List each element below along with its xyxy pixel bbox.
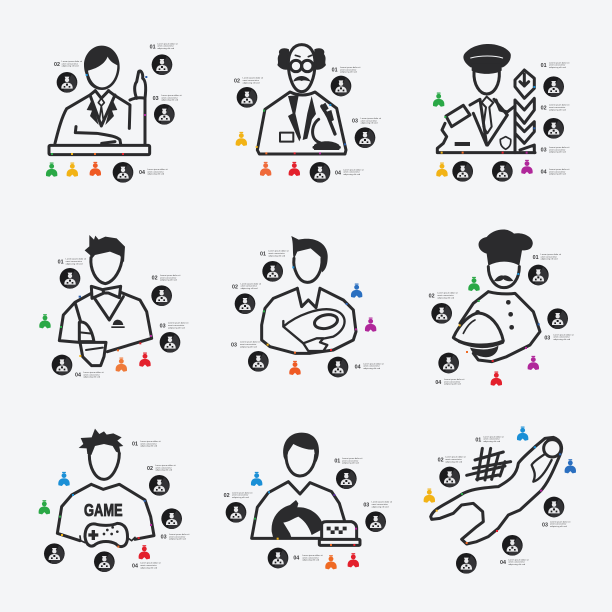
caption 02: adipiscing elit sed: [549, 108, 567, 111]
caption 02: Lorem ipsum dolor sit: [549, 104, 570, 107]
caption 01: amet consectetur: [157, 45, 174, 48]
caption 02: Lorem ipsum dolor sit: [160, 274, 181, 277]
caption 02: amet consectetur: [549, 106, 566, 109]
label 04: 04: [335, 170, 341, 176]
caption 04: amet consectetur: [508, 561, 525, 564]
caption 04: amet consectetur: [140, 564, 157, 567]
label 04: 04: [132, 563, 138, 569]
caption 03: adipiscing elit sed: [549, 151, 567, 154]
badge 03: [154, 104, 175, 125]
caption 04: adipiscing elit sed: [444, 383, 462, 386]
icon: dark blue person: [565, 459, 576, 473]
caption 04: adipiscing elit sed: [83, 376, 101, 379]
caption 03: amet consectetur: [169, 535, 186, 538]
caption 02: Lorem ipsum dolor sit: [437, 292, 458, 295]
caption 03: amet consectetur: [161, 96, 178, 99]
icon: blue person top: [517, 427, 528, 441]
panel: officer: [433, 44, 570, 182]
caption 01: amet consectetur: [66, 260, 82, 263]
badge 02: [226, 502, 246, 523]
caption 01: amet consectetur: [268, 252, 285, 255]
badge 04: [52, 355, 72, 375]
caption 02: Lorem ipsum dolor sit: [243, 77, 263, 80]
badge 02: [431, 303, 452, 324]
caption 02: adipiscing elit sed: [155, 469, 173, 472]
caption 03: adipiscing elit sed: [372, 505, 389, 508]
label 02: 02: [234, 78, 240, 84]
label 03: 03: [160, 323, 166, 329]
caption 04: adipiscing elit sed: [549, 173, 567, 176]
caption 04: adipiscing elit sed: [140, 566, 158, 569]
label 03: 03: [541, 148, 547, 154]
icon: orange person: [289, 361, 301, 375]
label 01: 01: [533, 255, 539, 261]
label 04: 04: [435, 380, 441, 386]
caption 03: adipiscing elit sed: [240, 345, 258, 348]
caption 03: amet consectetur: [553, 336, 570, 339]
badge 04: [94, 551, 115, 572]
figure: race track circuit: [431, 437, 562, 544]
icon: red person: [289, 162, 300, 176]
badge 01: [262, 261, 283, 282]
label 04: 04: [293, 556, 299, 562]
figure: waiter with bottle: [59, 235, 152, 366]
badge 02: [544, 497, 564, 517]
caption 02: adipiscing elit sed: [62, 65, 79, 68]
caption 04: amet consectetur: [343, 171, 360, 174]
label 01: 01: [334, 459, 340, 465]
panel: waiter: [39, 235, 189, 379]
figure: gamer with controller: [57, 429, 154, 547]
badge 04: [113, 162, 133, 183]
label 04: 04: [500, 560, 506, 566]
badge 02: [237, 87, 257, 108]
caption 03: amet consectetur: [549, 148, 566, 151]
label 03: 03: [352, 119, 358, 125]
caption 04: amet consectetur: [444, 380, 461, 383]
line colour markers: [441, 86, 535, 154]
caption 04: adipiscing elit sed: [343, 173, 361, 176]
label 03: 03: [153, 96, 159, 102]
badge 01: [528, 265, 549, 285]
label 01: 01: [332, 68, 338, 74]
icon: yellow person: [67, 163, 78, 177]
caption 02: amet consectetur: [62, 62, 78, 65]
caption 01: adipiscing elit sed: [268, 254, 286, 257]
caption 04: amet consectetur: [147, 170, 164, 173]
caption 03: adipiscing elit sed: [550, 525, 568, 528]
badge 03: [452, 161, 473, 182]
badge 03: [44, 543, 65, 564]
caption 03: Lorem ipsum dolor sit: [361, 117, 381, 120]
label 03: 03: [231, 343, 237, 349]
badge 04: [438, 353, 459, 373]
caption 03: Lorem ipsum dolor sit: [553, 333, 574, 336]
badge 04: [328, 357, 348, 377]
caption 01: adipiscing elit sed: [549, 66, 567, 69]
caption 01: adipiscing elit sed: [140, 445, 158, 448]
line colour markers: [459, 273, 540, 362]
icon: red person: [139, 545, 150, 559]
caption 01: adipiscing elit sed: [541, 258, 558, 261]
caption 04: Lorem ipsum dolor sit: [147, 168, 168, 171]
caption 02: adipiscing elit sed: [160, 279, 178, 282]
icon: orange person: [260, 162, 271, 176]
line colour markers: [254, 491, 357, 546]
caption 04: adipiscing elit sed: [302, 559, 320, 562]
badge 02: [57, 72, 77, 93]
icon: yellow person: [436, 163, 448, 177]
icon: blue person: [58, 472, 70, 486]
line colour markers: [263, 266, 357, 354]
label 01: 01: [475, 437, 481, 443]
caption 01: Lorem ipsum dolor sit: [342, 457, 363, 460]
caption 02: adipiscing elit sed: [445, 460, 463, 463]
caption 01: amet consectetur: [340, 68, 357, 71]
panel: scientist: [234, 45, 381, 183]
badge 01: [439, 467, 460, 487]
caption 01: adipiscing elit sed: [66, 262, 83, 265]
caption 02: adipiscing elit sed: [232, 496, 250, 499]
badge 02: [543, 118, 564, 139]
badge 01: [149, 475, 170, 496]
figure: chef with cloche: [453, 230, 540, 362]
caption 02: amet consectetur: [243, 79, 259, 82]
panel: gamer: [39, 429, 190, 572]
line colour markers: [436, 446, 561, 544]
icon: green person: [46, 163, 57, 177]
line colour markers: [60, 296, 152, 357]
badge 04: [310, 162, 330, 183]
badge 03: [547, 308, 568, 329]
icon: purple person: [521, 160, 533, 174]
badge 04: [456, 553, 477, 574]
caption 01: adipiscing elit sed: [157, 47, 175, 50]
label 03: 03: [161, 535, 167, 541]
caption 04: Lorem ipsum dolor sit: [343, 168, 364, 171]
badge 03: [355, 127, 375, 148]
label 02: 02: [54, 62, 60, 68]
badge 02: [235, 293, 255, 314]
badge 04: [492, 161, 513, 182]
caption 01: amet consectetur: [483, 438, 500, 441]
badge 03: [248, 351, 269, 372]
panel: politician: [46, 42, 182, 183]
icon: red person: [139, 353, 151, 367]
caption 01: adipiscing elit sed: [342, 462, 360, 465]
figure: scientist with microscope: [257, 45, 346, 154]
caption 01: Lorem ipsum dolor sit: [140, 440, 161, 443]
caption 02: adipiscing elit sed: [241, 287, 258, 290]
icon: green person: [39, 314, 51, 328]
caption 04: adipiscing elit sed: [508, 563, 526, 566]
badge 01: [60, 268, 80, 289]
caption 04: Lorem ipsum dolor sit: [140, 562, 161, 565]
badge 03: [365, 511, 386, 532]
label 01: 01: [541, 63, 547, 69]
icon: blue person: [251, 472, 262, 486]
caption 04: amet consectetur: [83, 373, 100, 376]
badge 02: [151, 285, 172, 306]
label 03: 03: [542, 522, 548, 528]
caption 01: Lorem ipsum dolor sit: [483, 435, 504, 438]
caption 02: Lorem ipsum dolor sit: [232, 491, 253, 494]
caption 01: adipiscing elit sed: [340, 71, 358, 74]
caption 04: adipiscing elit sed: [147, 173, 165, 176]
figure: officer with wheat: [437, 44, 535, 153]
icon: purple person: [528, 356, 539, 370]
badge 01: [336, 468, 357, 489]
caption 02: Lorem ipsum dolor sit: [62, 60, 82, 63]
caption 01: amet consectetur: [140, 442, 157, 445]
caption 04: amet consectetur: [363, 365, 380, 368]
badge 01: [543, 76, 564, 97]
badge 03: [502, 535, 523, 556]
caption 02: amet consectetur: [445, 458, 462, 461]
caption 01: Lorem ipsum dolor sit: [66, 258, 86, 261]
caption 01: amet consectetur: [549, 64, 566, 67]
badge 02: [161, 508, 182, 529]
figure: taxi driver: [252, 433, 360, 545]
badge 01: [331, 76, 351, 96]
caption 03: Lorem ipsum dolor sit: [372, 501, 392, 504]
caption 01: adipiscing elit sed: [483, 440, 501, 443]
caption 01: Lorem ipsum dolor sit: [268, 250, 289, 253]
icon: purple person: [365, 318, 376, 332]
caption 03: Lorem ipsum dolor sit: [240, 341, 261, 344]
caption 03: amet consectetur: [372, 503, 388, 506]
caption 04: Lorem ipsum dolor sit: [444, 378, 465, 381]
label 04: 04: [75, 373, 81, 379]
line colour markers: [59, 494, 152, 548]
icon: green person: [39, 500, 50, 514]
icon: orange person: [90, 162, 101, 176]
label 01: 01: [260, 252, 266, 258]
line colour markers: [256, 104, 346, 154]
caption 04: Lorem ipsum dolor sit: [83, 371, 104, 374]
caption 02: amet consectetur: [241, 285, 257, 288]
label 04: 04: [541, 170, 547, 176]
label 02: 02: [438, 457, 444, 463]
label 04: 04: [355, 364, 361, 370]
caption 04: Lorem ipsum dolor sit: [549, 168, 570, 171]
caption 02: adipiscing elit sed: [437, 296, 455, 299]
icon: yellow person: [236, 132, 247, 146]
panel: taxi driver: [224, 433, 392, 569]
caption 03: Lorem ipsum dolor sit: [169, 533, 190, 536]
caption 03: Lorem ipsum dolor sit: [550, 520, 571, 523]
caption 03: amet consectetur: [361, 119, 377, 122]
caption 03: adipiscing elit sed: [168, 326, 186, 329]
caption 02: Lorem ipsum dolor sit: [155, 464, 176, 467]
caption 03: amet consectetur: [168, 324, 185, 327]
label 02: 02: [232, 284, 238, 290]
caption 03: adipiscing elit sed: [553, 338, 571, 341]
caption 04: Lorem ipsum dolor sit: [508, 558, 529, 561]
caption 01: Lorem ipsum dolor sit: [549, 61, 570, 64]
caption 03: amet consectetur: [550, 523, 567, 526]
icon: orange person: [116, 358, 127, 372]
caption 02: Lorem ipsum dolor sit: [445, 456, 466, 459]
caption 03: Lorem ipsum dolor sit: [549, 146, 570, 149]
label 04: 04: [139, 170, 145, 176]
panel: butcher: [231, 236, 384, 377]
label 02: 02: [147, 466, 153, 472]
badge 03: [160, 332, 180, 353]
caption 02: adipiscing elit sed: [243, 81, 260, 84]
panel: chef: [429, 230, 574, 386]
caption 01: amet consectetur: [342, 459, 359, 462]
label 02: 02: [429, 294, 435, 300]
badge 04: [268, 548, 288, 568]
caption 02: amet consectetur: [437, 294, 454, 297]
caption 01: Lorem ipsum dolor sit: [157, 42, 178, 45]
label 03: 03: [544, 336, 550, 342]
caption 02: amet consectetur: [155, 466, 172, 469]
caption 04: amet consectetur: [549, 170, 566, 173]
icon: red person: [348, 553, 359, 567]
figure: man at desk with raised hand: [49, 46, 150, 155]
caption 02: Lorem ipsum dolor sit: [241, 282, 261, 285]
label 01: 01: [58, 259, 64, 265]
badge 01: [152, 54, 172, 75]
label 01: 01: [132, 442, 138, 448]
icon: green person: [468, 277, 480, 291]
label 03: 03: [363, 502, 369, 508]
caption 02: amet consectetur: [160, 276, 177, 279]
icon: yellow person: [424, 489, 435, 503]
figure: man holding ham: [262, 236, 356, 353]
line colour markers: [51, 74, 147, 155]
caption 04: amet consectetur: [302, 556, 319, 559]
caption 02: amet consectetur: [232, 494, 249, 497]
caption 04: Lorem ipsum dolor sit: [302, 554, 323, 557]
label 01: 01: [150, 44, 156, 50]
label 02: 02: [541, 105, 547, 111]
caption 03: adipiscing elit sed: [169, 538, 187, 541]
caption 04: Lorem ipsum dolor sit: [363, 362, 384, 365]
caption 03: adipiscing elit sed: [161, 99, 179, 102]
panel: race track: [424, 427, 576, 574]
icon: blue person: [351, 284, 362, 298]
label 02: 02: [224, 493, 230, 499]
caption 03: adipiscing elit sed: [361, 122, 378, 125]
caption 01: Lorem ipsum dolor sit: [340, 66, 361, 69]
caption 04: adipiscing elit sed: [363, 367, 381, 370]
icon: orange person: [325, 555, 337, 569]
icon: red person: [491, 372, 502, 386]
icon: green person: [433, 93, 444, 107]
caption 01: Lorem ipsum dolor sit: [541, 253, 561, 256]
label 02: 02: [152, 275, 158, 281]
caption 03: Lorem ipsum dolor sit: [161, 94, 182, 97]
caption 01: amet consectetur: [541, 255, 557, 258]
caption 03: amet consectetur: [240, 343, 257, 346]
text: GAME: GAME: [84, 500, 123, 520]
caption 03: Lorem ipsum dolor sit: [168, 322, 189, 325]
